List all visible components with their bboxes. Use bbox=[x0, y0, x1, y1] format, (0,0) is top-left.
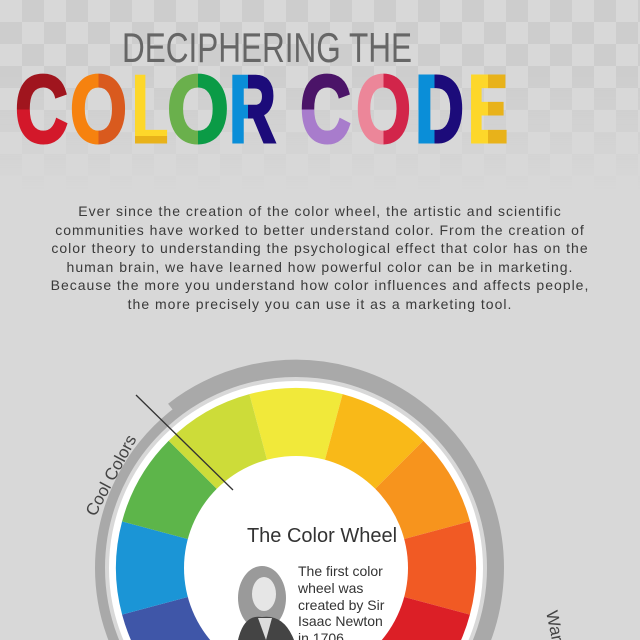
text: newton: Isaac Newton bbox=[298, 613, 383, 629]
intro text: color theory to understanding the psychological effect that color has on the bbox=[51, 240, 589, 256]
intro text: Ever since the creation of the color wheel, the artistic and scientific bbox=[78, 203, 562, 219]
text: newton: wheel was bbox=[297, 580, 363, 596]
intro text: communities have worked to better understand color. From the creation of bbox=[55, 222, 585, 238]
arc: cool colors bbox=[100, 372, 492, 640]
heading: the color wheel: The Color Wheel bbox=[247, 525, 397, 547]
intro text: the more precisely you can use it as a marketing tool. bbox=[128, 296, 512, 312]
arc: warm colors bbox=[173, 368, 496, 640]
text: newton: created by Sir bbox=[298, 597, 385, 613]
divider line bbox=[136, 395, 233, 490]
intro text: Because the more you understand how color influences and affects people, bbox=[51, 277, 589, 293]
label: cool colors: Cool Colors bbox=[82, 432, 140, 519]
title: color code bbox=[15, 66, 508, 148]
color wheel bbox=[82, 360, 581, 640]
text: newton: The first color bbox=[298, 563, 383, 579]
intro text bbox=[51, 203, 589, 312]
icon: newton portrait bbox=[238, 566, 294, 640]
intro text: human brain, we have learned how powerful color can be in marketing. bbox=[67, 259, 573, 275]
wheel segments bbox=[116, 388, 476, 640]
